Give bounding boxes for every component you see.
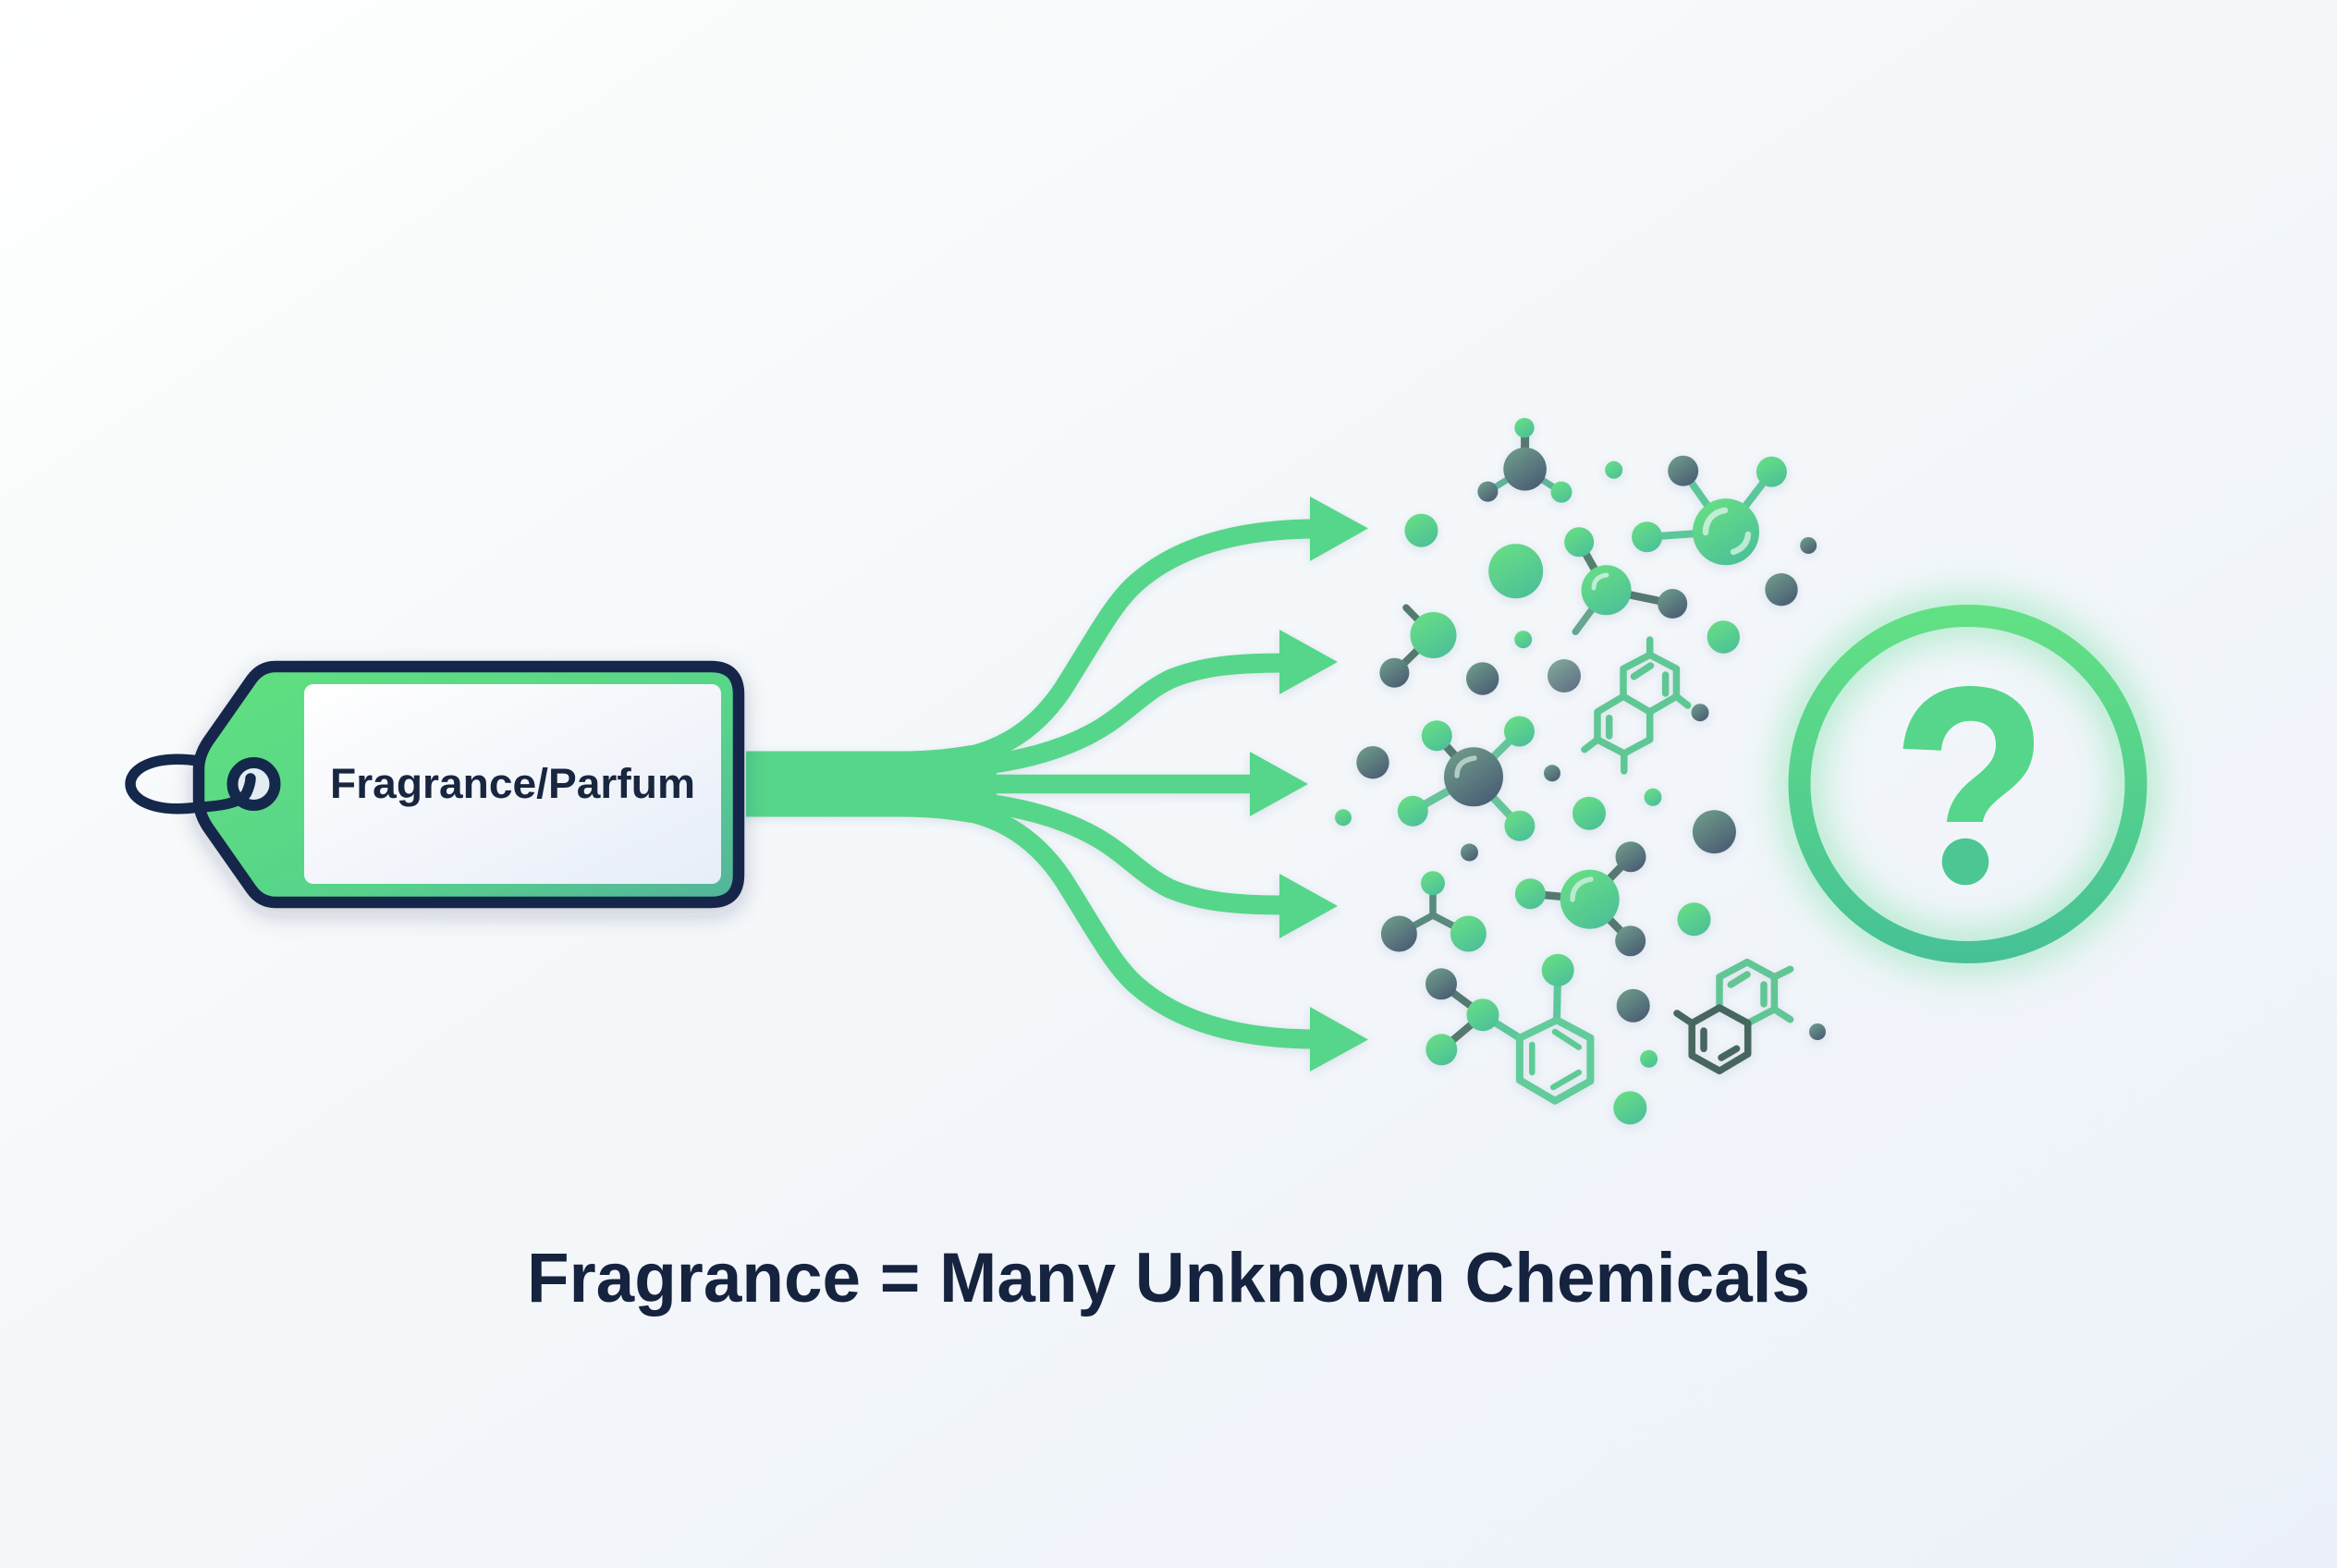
molecule I: benzene ring with atoms (1425, 954, 1590, 1101)
molecule G (1515, 841, 1646, 956)
question mark glyph: ? (1893, 631, 2047, 945)
molecule C (1564, 527, 1687, 631)
string loop (130, 759, 251, 809)
molecule J: two-tone ring structure (1677, 962, 1791, 1071)
arrow 2 (961, 630, 1338, 767)
ring (1799, 616, 2135, 952)
molecule E: ring structure (1585, 640, 1708, 771)
arrow 1 (924, 496, 1368, 761)
arrow 3 (961, 752, 1308, 816)
question mark in glowing circle (1799, 616, 2135, 952)
tag body (199, 667, 739, 902)
tag text: Fragrance/Parfum (330, 760, 695, 807)
molecule B (1632, 456, 1787, 565)
infographic canvas (0, 0, 2186, 1317)
arrow 4 (961, 801, 1338, 938)
arrow 5 (924, 807, 1368, 1072)
loose atoms (1335, 461, 1826, 1124)
molecule D (1379, 607, 1457, 688)
question mark dot (1942, 839, 1988, 885)
molecule A (1477, 418, 1572, 503)
price tag labelled Fragrance/Parfum (130, 667, 739, 902)
molecule H (1381, 871, 1487, 952)
stem from tag (746, 745, 1008, 823)
title: Fragrance = Many Unknown Chemicals (527, 1239, 1810, 1317)
molecule F (1398, 716, 1535, 841)
cluster of unknown chemical molecules (1335, 418, 1826, 1124)
tag to arrows: branching flow (746, 496, 1368, 1072)
white label panel (304, 684, 721, 884)
eyelet ring (233, 763, 275, 805)
